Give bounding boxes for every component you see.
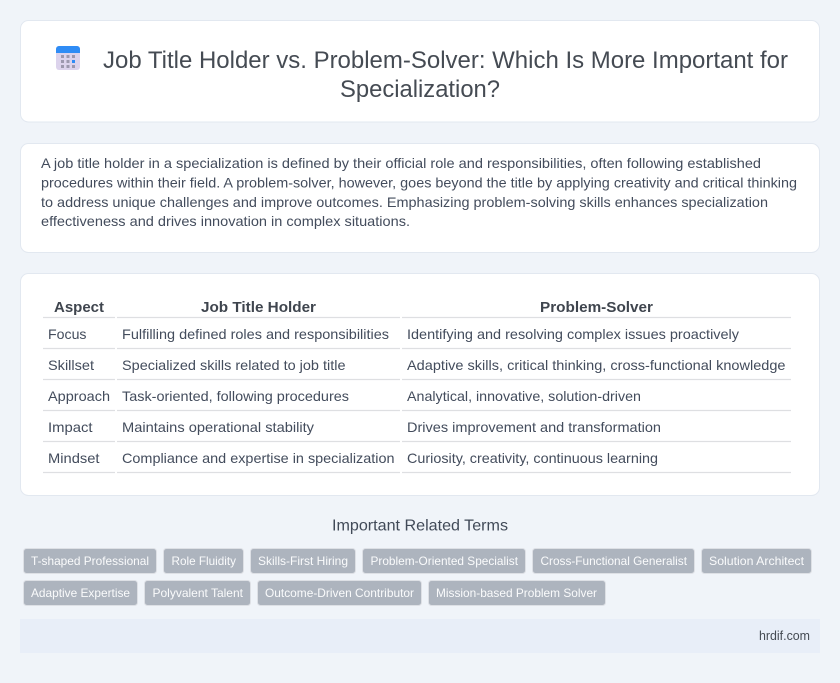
title xyxy=(103,47,788,103)
table row: Approach: Analytical, innovative, solution-driven xyxy=(407,388,641,404)
tag xyxy=(164,548,244,574)
table header: Job Title Holder xyxy=(201,299,316,316)
table row: Mindset: Mindset xyxy=(48,450,100,466)
table row: Skillset: Adaptive skills, critical thinking, cross-functional knowledge xyxy=(407,357,786,373)
table row: Impact xyxy=(48,419,661,435)
table row: Skillset: Skillset xyxy=(48,357,94,373)
heading: related terms: Important Related Terms xyxy=(332,518,508,534)
table row: Focus xyxy=(48,326,739,342)
footer source: hrdif.com xyxy=(759,629,810,643)
table header xyxy=(54,299,653,316)
tag: Adaptive Expertise xyxy=(31,586,130,600)
title: Specialization? xyxy=(340,76,500,103)
tag xyxy=(144,580,250,606)
table row: Focus: Focus xyxy=(48,326,86,342)
table row: Impact: Drives improvement and transformation xyxy=(407,419,661,435)
icon: calendar xyxy=(56,46,80,70)
tag: Role Fluidity xyxy=(172,554,236,568)
table row: Approach xyxy=(48,388,641,404)
tag xyxy=(532,548,694,574)
text block: description paragraph: effectiveness and drives innovation in complex situations. xyxy=(41,213,410,229)
tag xyxy=(362,548,526,574)
text block: description paragraph: A job title holder in a specialization is defined by their official role and responsibilities, often following established xyxy=(41,155,761,171)
table header: Problem-Solver xyxy=(540,299,653,316)
tag: Mission-based Problem Solver xyxy=(436,586,597,600)
tag xyxy=(428,580,606,606)
table row: Approach: Approach xyxy=(48,388,110,404)
table row: Mindset: Compliance and expertise in specialization xyxy=(122,450,394,466)
table row: Impact: Impact xyxy=(48,419,93,435)
text block: description paragraph: procedures within their field. A problem-solver, however, goes beyond the title by applying creativity and critical thinking xyxy=(41,174,797,190)
panel: description xyxy=(20,144,820,252)
table row: Impact: Maintains operational stability xyxy=(122,419,314,435)
table header: Aspect xyxy=(54,299,104,316)
tag: Outcome-Driven Contributor xyxy=(265,586,414,600)
table row: Skillset: Specialized skills related to job title xyxy=(122,357,346,373)
tag: Skills-First Hiring xyxy=(258,554,348,568)
tag: Cross-Functional Generalist xyxy=(540,554,688,568)
table row: Skillset xyxy=(48,357,786,373)
tag: Solution Architect xyxy=(709,554,805,568)
panel: title header xyxy=(20,20,820,122)
tag: T-shaped Professional xyxy=(31,554,149,568)
tag list: related terms xyxy=(24,548,812,606)
tag: Problem-Oriented Specialist xyxy=(370,554,519,568)
tag: Polyvalent Talent xyxy=(152,586,244,600)
table row: Focus: Fulfilling defined roles and responsibilities xyxy=(122,326,389,342)
tag xyxy=(702,548,812,574)
tag xyxy=(24,580,138,606)
table row: Mindset: Curiosity, creativity, continuous learning xyxy=(407,450,658,466)
footer bar xyxy=(20,619,820,653)
tag xyxy=(24,548,156,574)
panel: comparison table xyxy=(20,274,820,496)
table row: Mindset xyxy=(48,450,658,466)
title: Job Title Holder vs. Problem-Solver: Which Is More Important for xyxy=(103,47,788,74)
text block: description paragraph xyxy=(41,155,797,229)
tag xyxy=(250,548,356,574)
tag xyxy=(258,580,422,606)
text block: description paragraph: to address unique challenges and improve outcomes. Emphasizing problem-solving skills enhances specialization xyxy=(41,194,768,210)
table row: Focus: Identifying and resolving complex issues proactively xyxy=(407,326,739,342)
table row: Approach: Task-oriented, following procedures xyxy=(122,388,349,404)
